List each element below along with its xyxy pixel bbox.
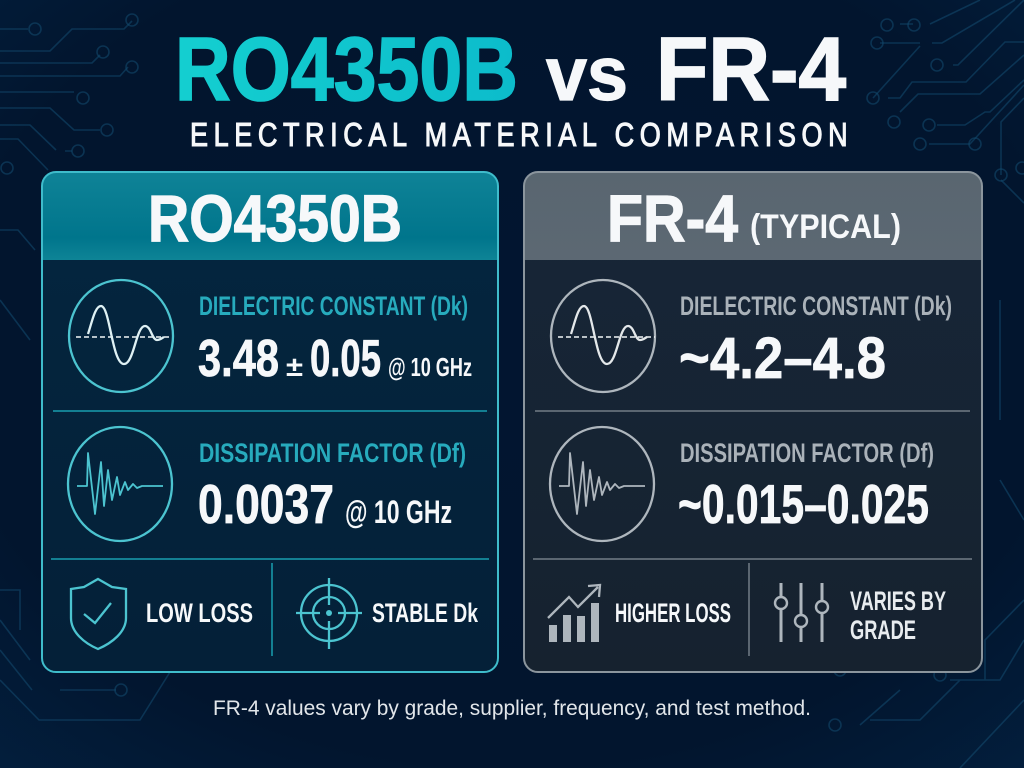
panel heading: FR-4	[607, 181, 738, 255]
divider	[53, 410, 487, 412]
icon: shield check	[71, 579, 126, 649]
label: varies by grade	[850, 586, 946, 645]
divider	[535, 410, 970, 412]
icon: rising chart	[548, 585, 600, 642]
icon: dissipation decay	[68, 427, 172, 541]
divider	[533, 559, 972, 656]
icon: target	[296, 578, 362, 649]
value: Dk: 3.48	[198, 330, 279, 388]
value: Dk	[198, 330, 472, 388]
value: Df: ~0.015–0.025	[678, 473, 929, 535]
value: Df: @ 10 GHz	[345, 494, 452, 530]
value: Dk: ±	[286, 351, 303, 382]
label: stable Dk: STABLE Dk	[372, 598, 479, 628]
icon: dielectric wave	[551, 280, 655, 392]
title	[175, 20, 846, 120]
label: dissipation factor: DISSIPATION FACTOR (Df)	[680, 438, 934, 468]
label: dielectric constant: DIELECTRIC CONSTANT (Dk)	[199, 291, 468, 321]
value: Dk: 0.05	[310, 330, 381, 388]
subtitle: ELECTRICAL MATERIAL COMPARISON	[190, 118, 848, 154]
panel: RO4350B	[42, 172, 498, 672]
value: Df	[198, 473, 452, 535]
panel: FR-4	[524, 172, 982, 672]
icon: dissipation decay	[550, 427, 654, 541]
panel heading: RO4350B	[148, 181, 402, 255]
value: Dk: @ 10 GHz	[388, 352, 472, 382]
label: low loss: LOW LOSS	[146, 598, 253, 628]
icon: dielectric wave	[69, 280, 173, 392]
divider	[51, 559, 489, 656]
panel heading	[607, 181, 901, 255]
title: RO4350B	[175, 20, 518, 120]
label: varies by grade: VARIES BY	[850, 586, 946, 616]
value: Dk: ~4.2–4.8	[679, 326, 886, 391]
title: FR-4	[656, 20, 846, 120]
value: Df: 0.0037	[198, 473, 334, 535]
label: higher loss: HIGHER LOSS	[615, 598, 731, 628]
icon: sliders	[775, 583, 828, 642]
label: varies by grade: GRADE	[850, 615, 916, 645]
panel heading: (TYPICAL)	[750, 208, 901, 246]
title: vs	[546, 32, 628, 117]
footnote: FR-4 values vary by grade, supplier, frequency, and test method.	[213, 697, 811, 720]
label: dissipation factor: DISSIPATION FACTOR (Df)	[199, 438, 466, 468]
